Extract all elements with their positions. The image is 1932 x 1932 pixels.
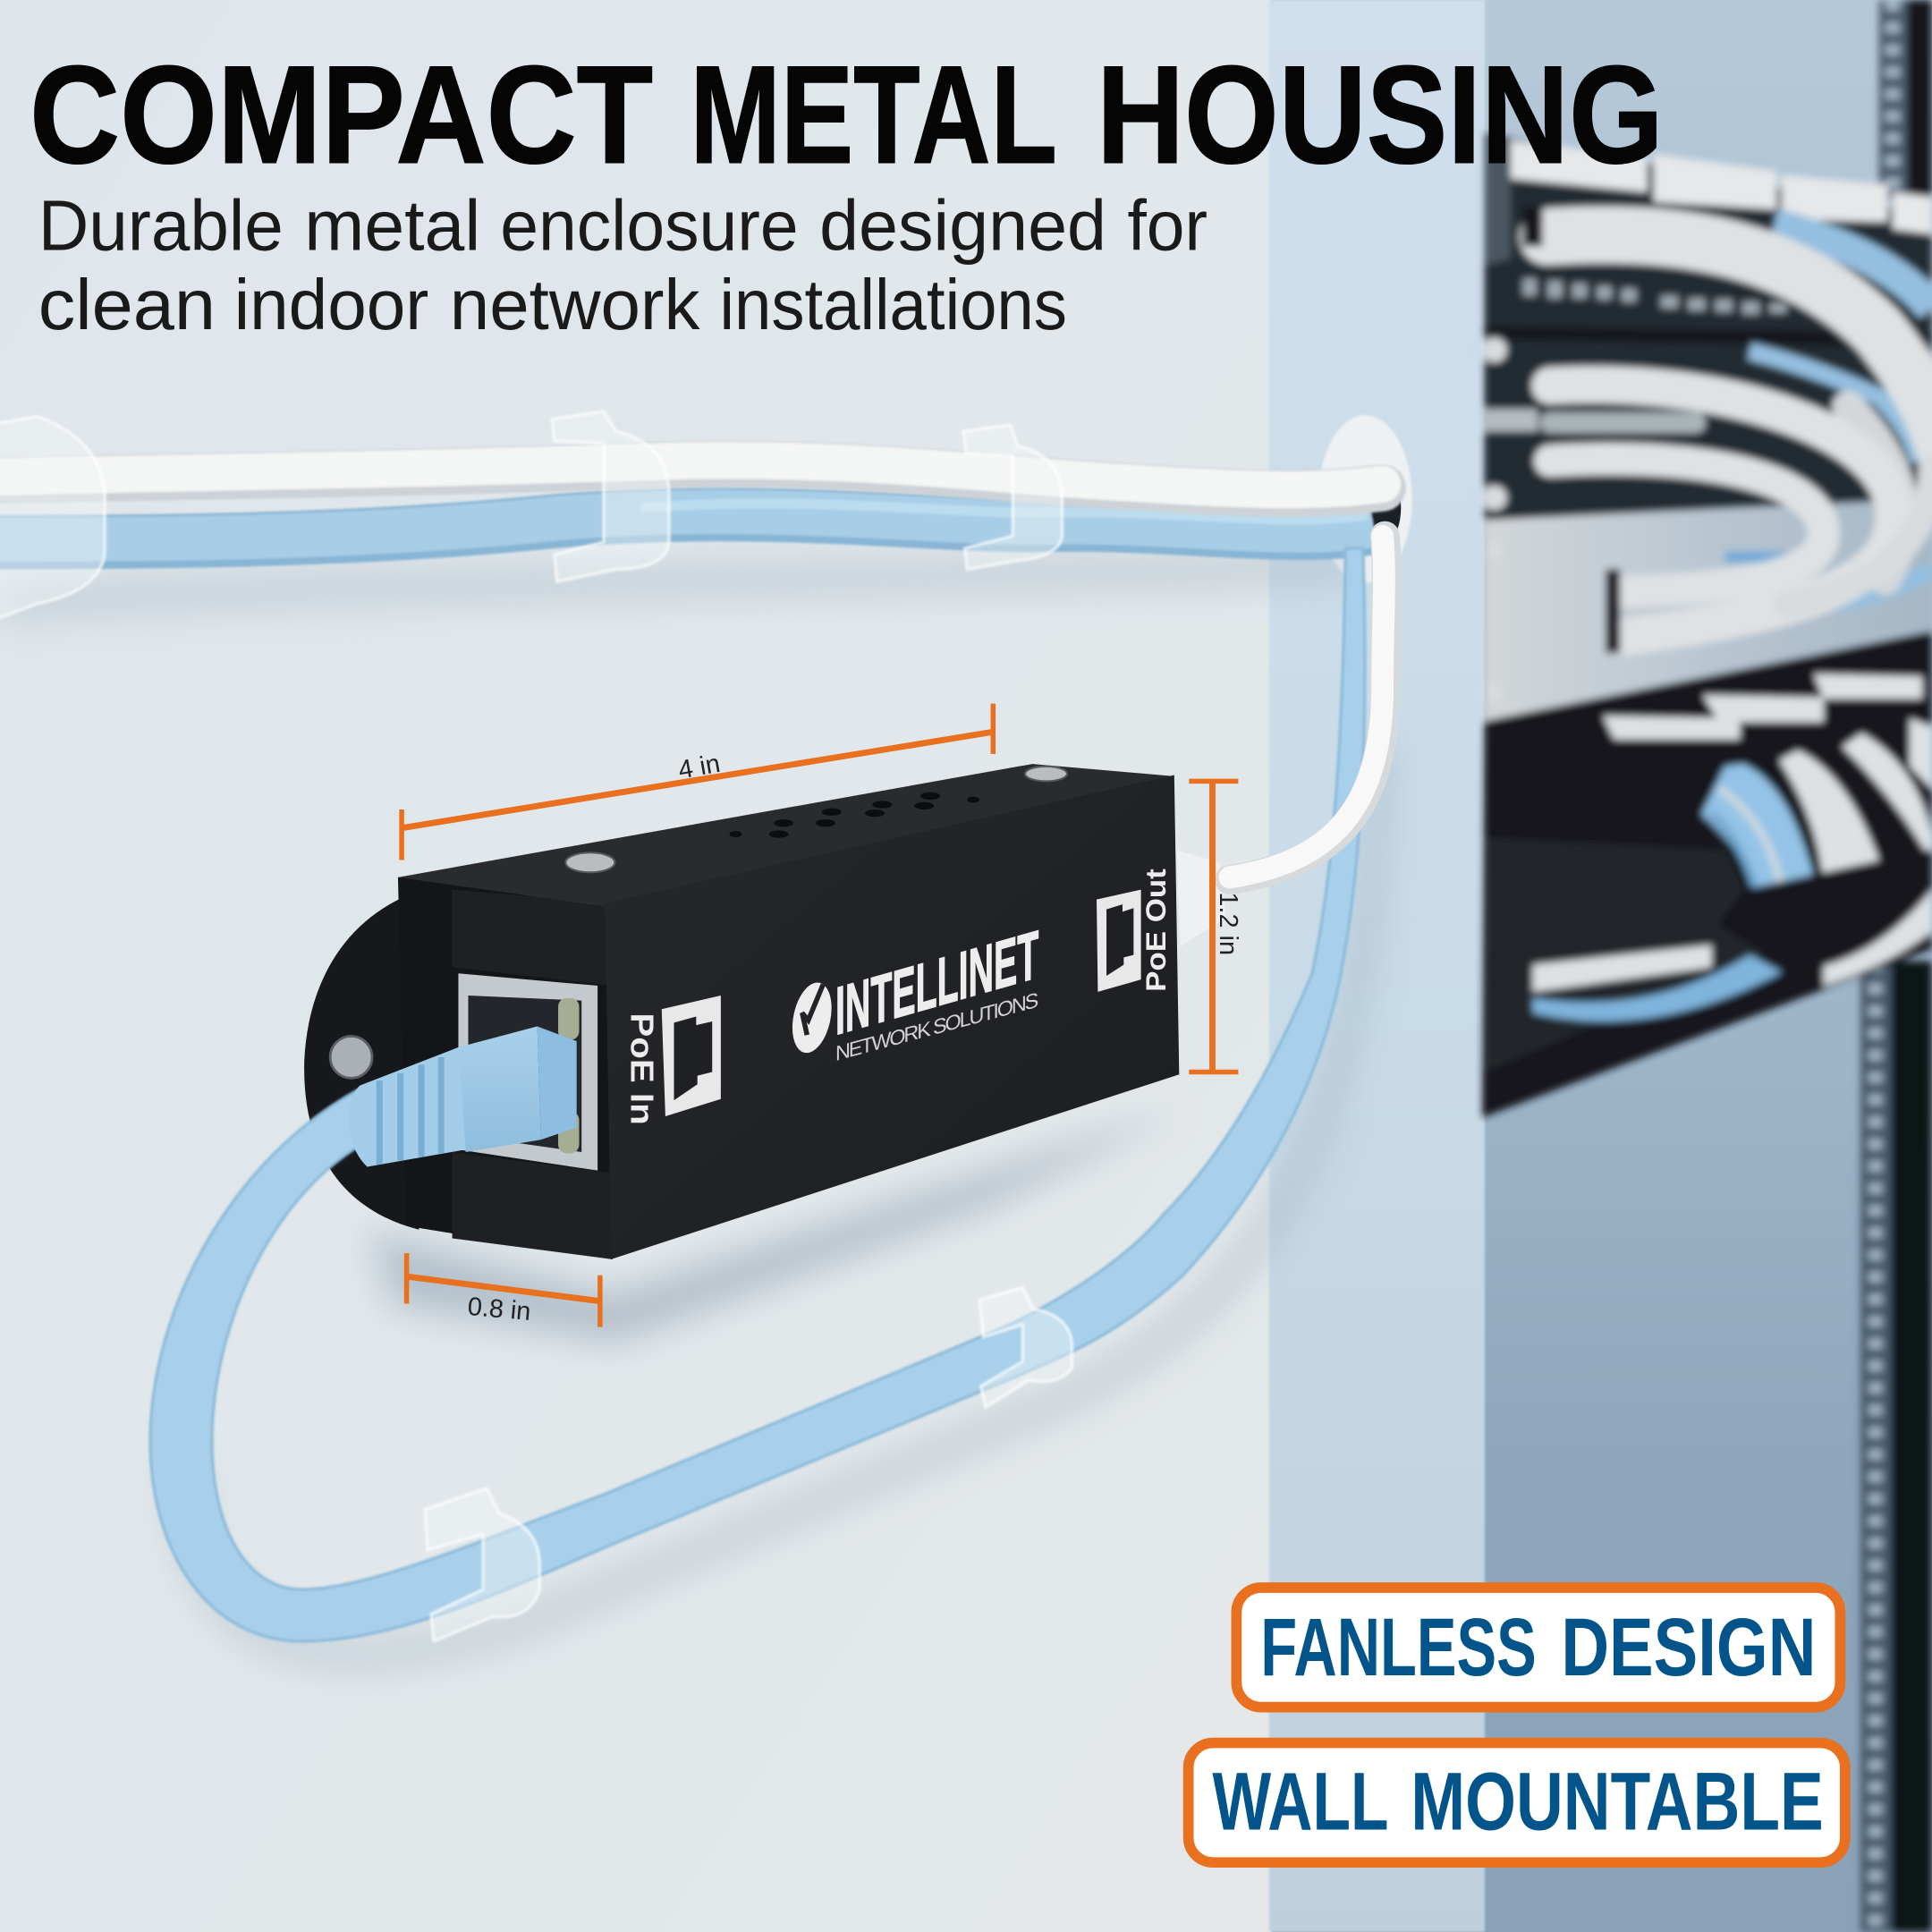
cable shadows <box>0 567 1380 1654</box>
lower blue cables <box>1533 764 1822 1021</box>
dimension: 4 in <box>402 704 993 860</box>
top vents <box>730 792 979 838</box>
clip 2 <box>552 411 669 581</box>
badge: wall mountable <box>1189 1743 1845 1862</box>
grommet and wall hole <box>1318 415 1412 583</box>
end cap <box>398 877 613 1259</box>
subtitle: enclosure <box>500 186 799 266</box>
subtitle: Durable <box>38 186 284 266</box>
subtitle: for <box>1127 186 1208 266</box>
clip 5 <box>425 1488 539 1641</box>
RJ45 port <box>458 973 597 1171</box>
long blue patch cable loop <box>150 548 1365 1641</box>
badge: wall mountable: MOUNTABLE <box>1411 1757 1824 1848</box>
badge: fanless design <box>1236 1588 1840 1707</box>
subtitle: installations <box>719 265 1067 344</box>
blue RJ45 plug <box>349 1027 577 1167</box>
subtitle: indoor <box>234 265 428 344</box>
INTELLINET logo: NETWORK SOLUTIONS <box>835 988 1038 1066</box>
title: METAL <box>690 37 1057 192</box>
rack rail bottom <box>1860 961 1932 1932</box>
badge: fanless design: FANLESS <box>1260 1602 1537 1693</box>
PoE In port icon <box>662 996 721 1116</box>
PoE In label: PoE In <box>623 1013 659 1125</box>
top screws <box>565 767 1067 872</box>
dimension: 0.8 in <box>407 1253 600 1327</box>
server rack in the background <box>1482 0 1932 1932</box>
device shadow <box>369 1109 1182 1343</box>
clip 1 <box>0 417 105 623</box>
white cable bundle <box>1547 234 1932 637</box>
cable clips <box>0 411 1072 1641</box>
subtitle: metal <box>304 186 480 266</box>
PoE Out label: PoE Out <box>1140 869 1172 992</box>
subtitle: network <box>450 265 701 344</box>
clip 4 <box>979 1288 1072 1407</box>
clip 3 <box>963 425 1062 569</box>
badge: fanless design: DESIGN <box>1561 1602 1817 1693</box>
PoE Out port icon <box>1097 890 1141 992</box>
rack rail top <box>1879 0 1932 234</box>
dimension: 1.2 in: 1.2 in <box>1214 892 1242 955</box>
dimension: 0.8 in: 0.8 in <box>466 1292 532 1326</box>
cable run: white along wall <box>0 461 1383 494</box>
side face <box>605 775 1179 1259</box>
logo check badge <box>786 979 837 1056</box>
lower dark panel <box>1482 631 1932 1117</box>
silver shelf <box>1485 499 1932 721</box>
title <box>30 37 1664 192</box>
label strips <box>1511 140 1932 234</box>
white patch cable to PoE Out <box>1177 536 1386 946</box>
cable run: blue along wall <box>0 504 1374 542</box>
cable tie <box>1717 849 1932 966</box>
top face <box>398 764 1174 907</box>
subtitle <box>38 186 1208 344</box>
title: HOUSING <box>1097 37 1664 192</box>
blue cables behind upper arcs <box>1725 225 1932 604</box>
title: COMPACT <box>30 37 653 192</box>
INTELLINET logo <box>835 917 1038 1066</box>
subtitle: designed <box>819 186 1106 266</box>
upper patch panel <box>1485 133 1932 521</box>
subtitle: clean <box>38 265 216 344</box>
device: PoE extender <box>349 764 1179 1259</box>
connector heads <box>1523 207 1620 653</box>
mounting flange <box>304 891 419 1230</box>
INTELLINET logo: INTELLINET <box>835 917 1038 1050</box>
badge: wall mountable: WALL <box>1213 1757 1389 1848</box>
rack screws <box>1482 337 1538 702</box>
lower white plugs <box>1533 674 1932 992</box>
dimension: 4 in: 4 in <box>676 750 723 785</box>
port numbers <box>1523 278 1786 314</box>
